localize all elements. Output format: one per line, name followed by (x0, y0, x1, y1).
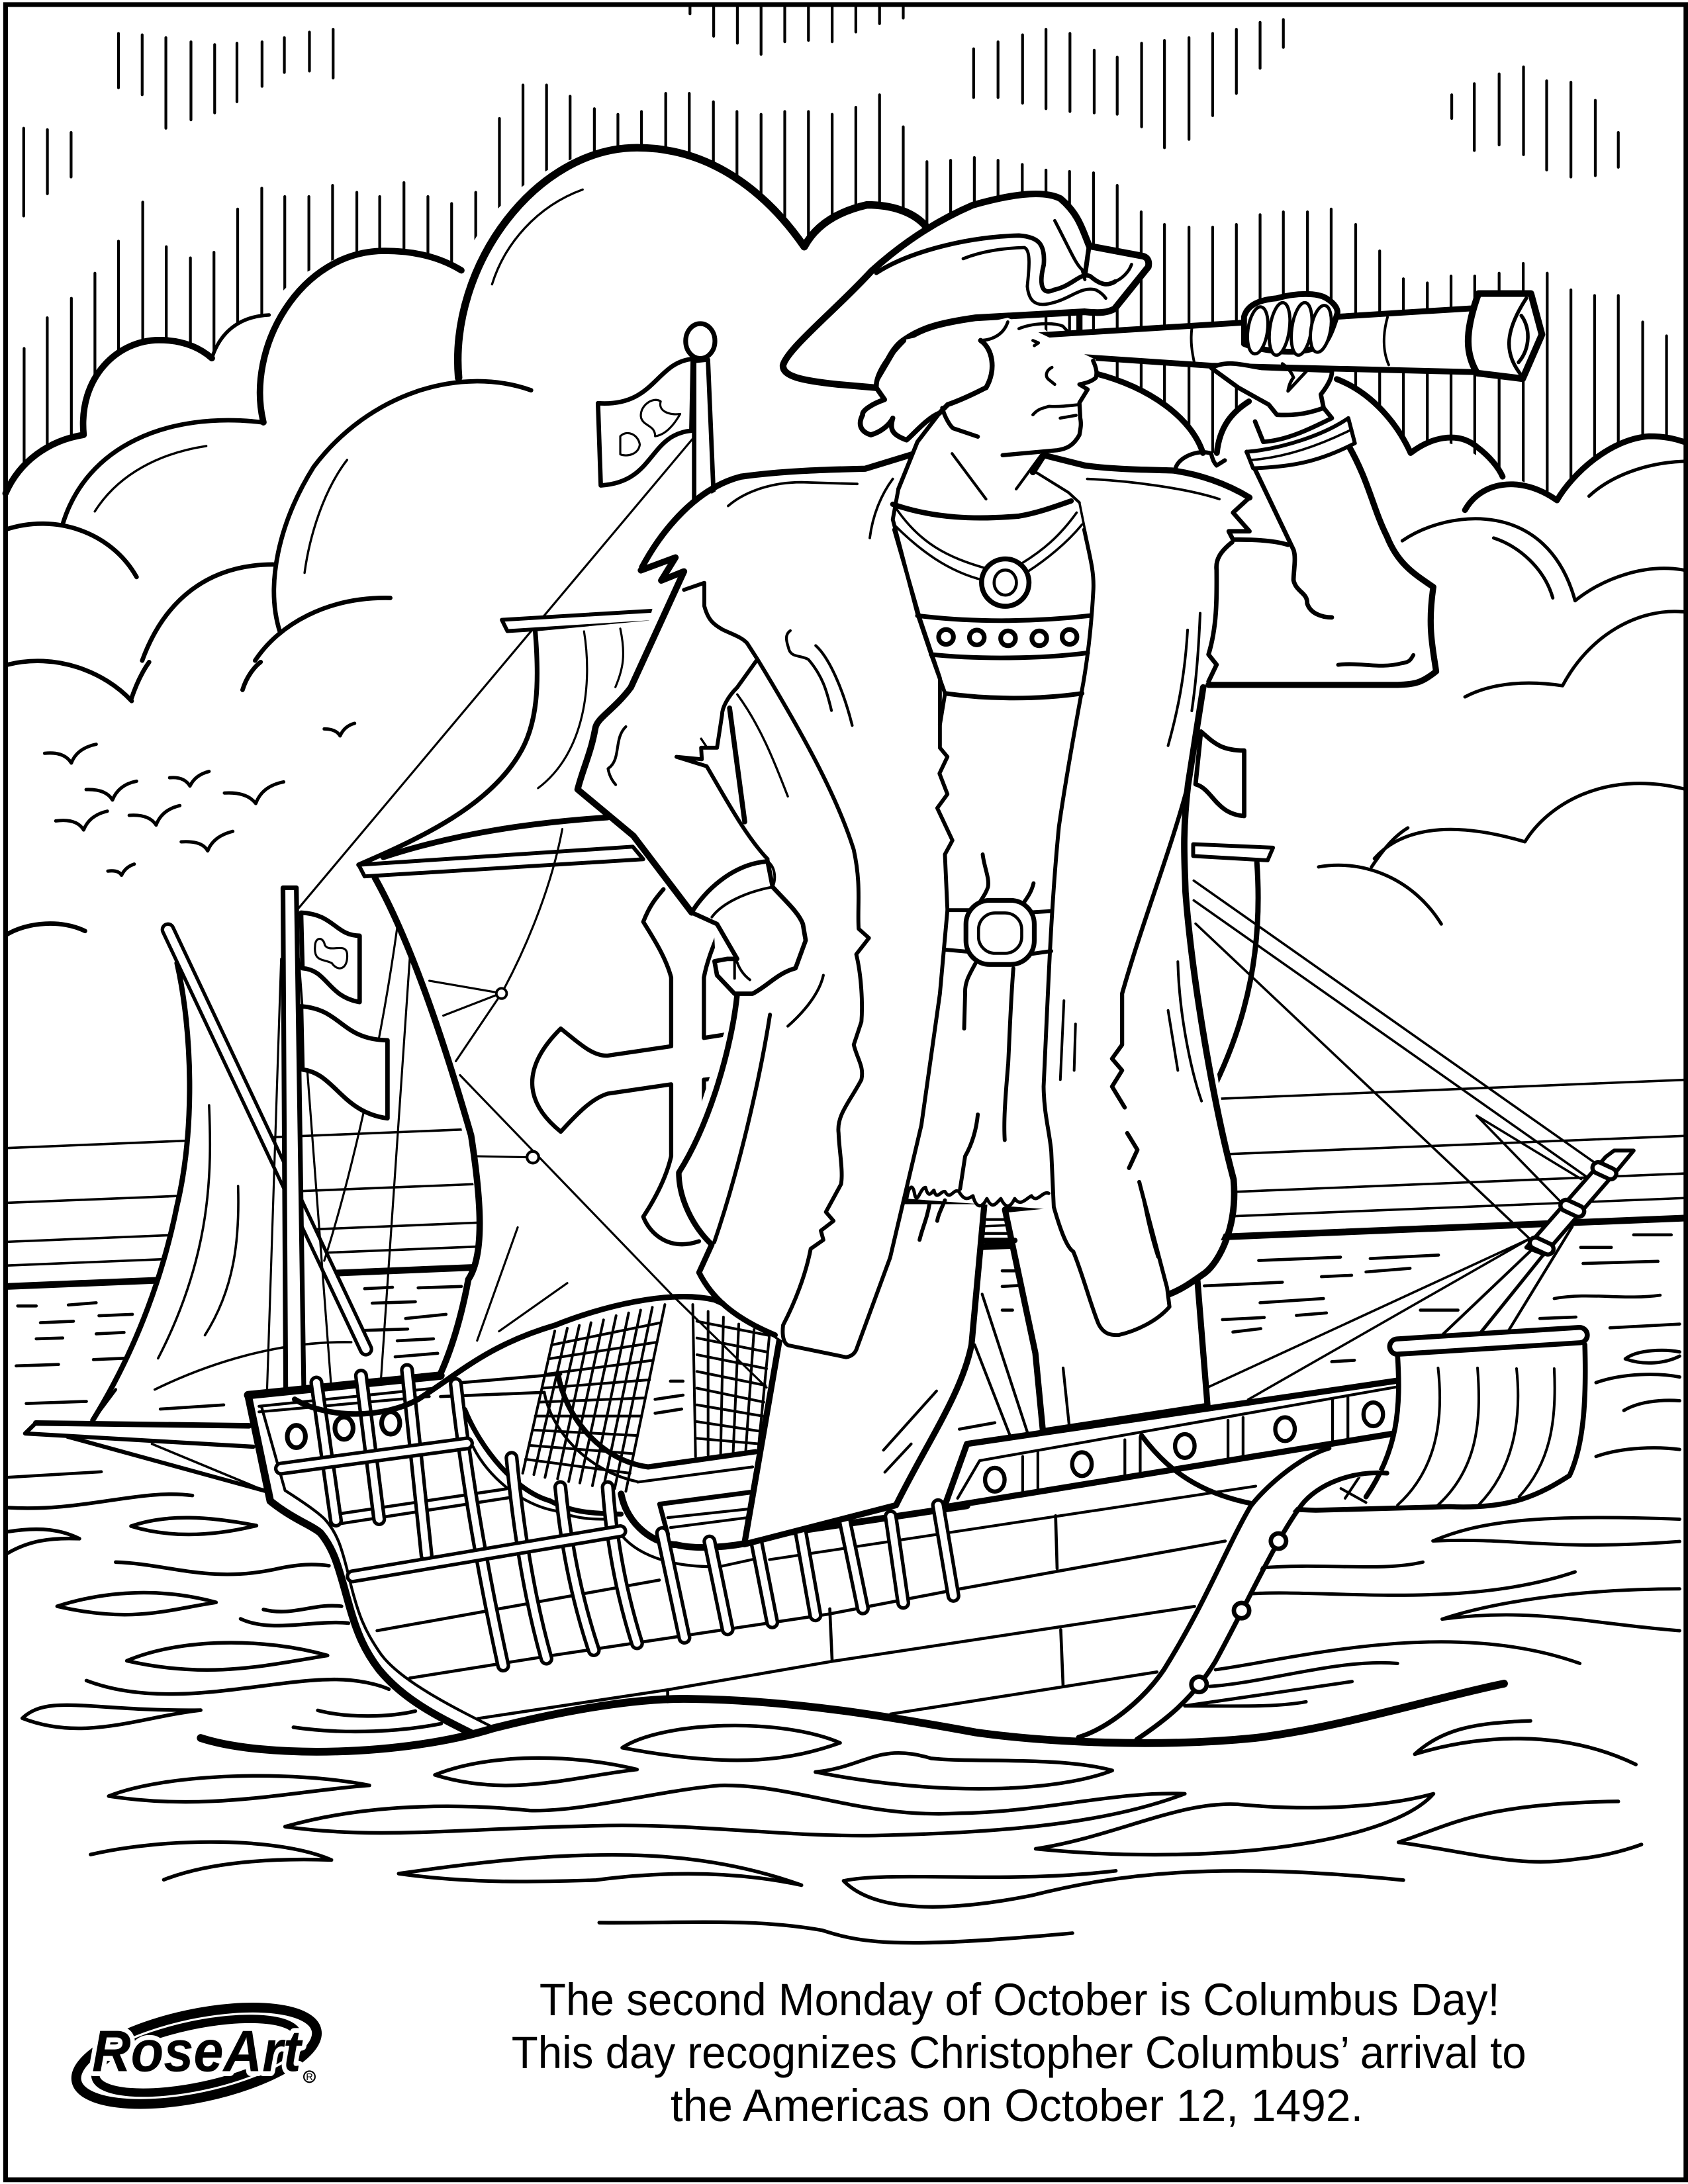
shoulder bump (1176, 452, 1225, 469)
medallion (982, 559, 1029, 606)
caption text (512, 1974, 1526, 2131)
bowsprit (1443, 1150, 1634, 1334)
main sail lower edge (295, 1297, 778, 1414)
spritsail (1142, 1327, 1588, 1514)
rigging line between masts (299, 437, 694, 908)
tunic studs (939, 629, 1077, 646)
hull ribs (281, 1370, 953, 1666)
horizon lines (7, 1080, 1684, 1287)
caption text: This day recognizes Christopher Columbus’ arrival to (512, 2027, 1526, 2078)
yard and stays on left ship (25, 1390, 270, 1492)
stern castle and hull lines (248, 1374, 1256, 1734)
belt and buckle (919, 854, 1051, 1240)
small mast and flags (267, 887, 410, 1394)
sea dashes (7, 1235, 1679, 1477)
head and hair (861, 318, 1096, 502)
coat body silhouette (577, 418, 1235, 1357)
RoseArt logo: R (306, 2072, 313, 2083)
right background sail and flag (1185, 731, 1273, 1084)
bowsprit rigging (1149, 881, 1594, 1414)
small left sail with yard (92, 930, 366, 1420)
sea swell along the keel (201, 1684, 1504, 1752)
hat (783, 194, 1149, 388)
prow band with bolts (1078, 1448, 1387, 1739)
coat outlines (578, 453, 1250, 1357)
clouds (5, 148, 1684, 1060)
hand on hilt (692, 861, 806, 994)
raised sleeve (1209, 408, 1436, 685)
tunic (893, 489, 1093, 1240)
caption text: the Americas on October 12, 1492. (671, 2080, 1363, 2131)
RoseArt logo: RoseArt (92, 2018, 303, 2083)
forecastle band (944, 1381, 1397, 1507)
rigging net (523, 1304, 769, 1491)
forward hull fill (248, 1376, 1575, 1739)
telescope (1038, 294, 1542, 379)
hand holding telescope (1211, 294, 1337, 415)
background flag mast (598, 324, 715, 509)
Columbus figure (577, 194, 1542, 1544)
legs (744, 1199, 1207, 1544)
caption text: The second Monday of October is Columbus Day! (539, 1974, 1500, 2025)
cross on main sail (532, 889, 727, 1244)
birds flock (44, 723, 355, 876)
torn tunic hem (907, 1187, 1049, 1206)
RoseArt logo (68, 1989, 325, 2122)
sky hatching (24, 7, 1667, 557)
main sail (358, 610, 836, 1388)
water waves (8, 1350, 1679, 1943)
stern gun ports (287, 1412, 400, 1447)
